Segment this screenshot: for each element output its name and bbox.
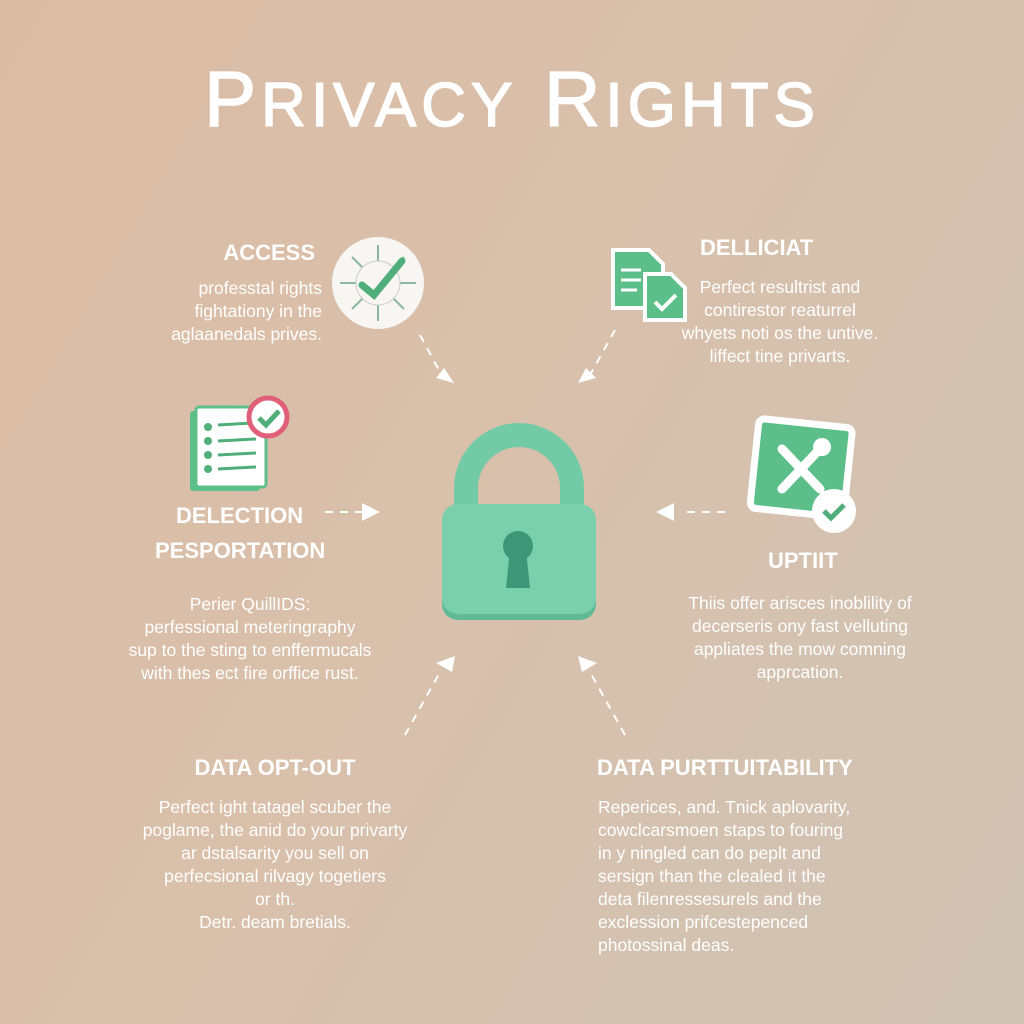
text: uptiit: decerseris ony fast velluting — [692, 616, 908, 636]
panel: access — [171, 237, 424, 344]
heading: delection: DELECTION — [176, 503, 303, 528]
heading: data opt-out: DATA OPT-OUT — [195, 755, 355, 780]
heading: access: ACCESS — [223, 240, 315, 265]
text: data opt-out: perfecsional rilvagy togetiers — [164, 866, 386, 886]
text: delliciat: contirestor reaturrel — [704, 300, 856, 320]
text: delection: perfessional meteringraphy — [144, 617, 356, 637]
text: uptiit: apprcation. — [757, 662, 843, 682]
text: delection: with thes ect fire orffice rust. — [141, 663, 359, 683]
text: uptiit: Thiis offer arisces inoblility of — [688, 593, 912, 613]
text: delliciat — [682, 277, 878, 366]
text: access — [171, 278, 322, 344]
text: data opt-out: or th. — [255, 889, 295, 909]
text: uptiit: appliates the mow comning — [694, 639, 906, 659]
text: delection: Perier QuillIDS: — [190, 594, 310, 614]
text: data purttuitability: deta filenressesurels and the — [598, 889, 822, 909]
text: data opt-out: poglame, the anid do your privarty — [143, 820, 407, 840]
heading: pesportation: PESPORTATION — [155, 538, 325, 563]
title: PRIVACY RIGHTS — [204, 55, 820, 143]
text: data purttuitability: photossinal deas. — [598, 935, 734, 955]
text: data purttuitability: sersign than the clealed it the — [598, 866, 826, 886]
icon: padlock — [442, 423, 596, 620]
icon: documents — [611, 248, 687, 322]
panel: delection — [129, 396, 371, 683]
text: data purttuitability: in y ningled can do peplt and — [598, 843, 821, 863]
panel: delliciat — [611, 235, 878, 366]
text: data opt-out: Perfect ight tatagel scuber the — [159, 797, 391, 817]
text: access: professtal rights — [198, 278, 322, 298]
panel: uptiit — [688, 415, 912, 682]
text: data opt-out: ar dstalsarity you sell on — [181, 843, 369, 863]
icon: checklist — [190, 396, 290, 491]
text: data purttuitability: exclession prifcestepenced — [598, 912, 808, 932]
text: delection: sup to the sting to enffermucals — [129, 640, 371, 660]
text: delliciat: Perfect resultrist and — [700, 277, 860, 297]
panel: data opt-out — [143, 755, 408, 932]
text: data purttuitability — [598, 797, 850, 955]
text: data purttuitability: cowclcarsmoen staps to fouring — [598, 820, 843, 840]
text: data opt-out — [143, 797, 408, 932]
text: delliciat: liffect tine privarts. — [710, 346, 850, 366]
heading: uptiit: UPTIIT — [768, 548, 838, 573]
text: access: fightationy in the — [195, 301, 322, 321]
text: data purttuitability: Reperices, and. Tnick aplovarity, — [598, 797, 850, 817]
text: access: aglaanedals prives. — [171, 324, 322, 344]
text: uptiit — [688, 593, 912, 682]
text: data opt-out: Detr. deam bretials. — [199, 912, 351, 932]
text: delliciat: whyets noti os the untive. — [682, 323, 878, 343]
heading: delliciat: DELLICIAT — [700, 235, 813, 260]
icon: compass — [332, 237, 424, 329]
panel: data purttuitability — [597, 755, 853, 955]
heading: data purttuitability: DATA PURTTUITABILITY — [597, 755, 853, 780]
icon: tools — [746, 415, 856, 533]
text: delection — [129, 594, 371, 683]
